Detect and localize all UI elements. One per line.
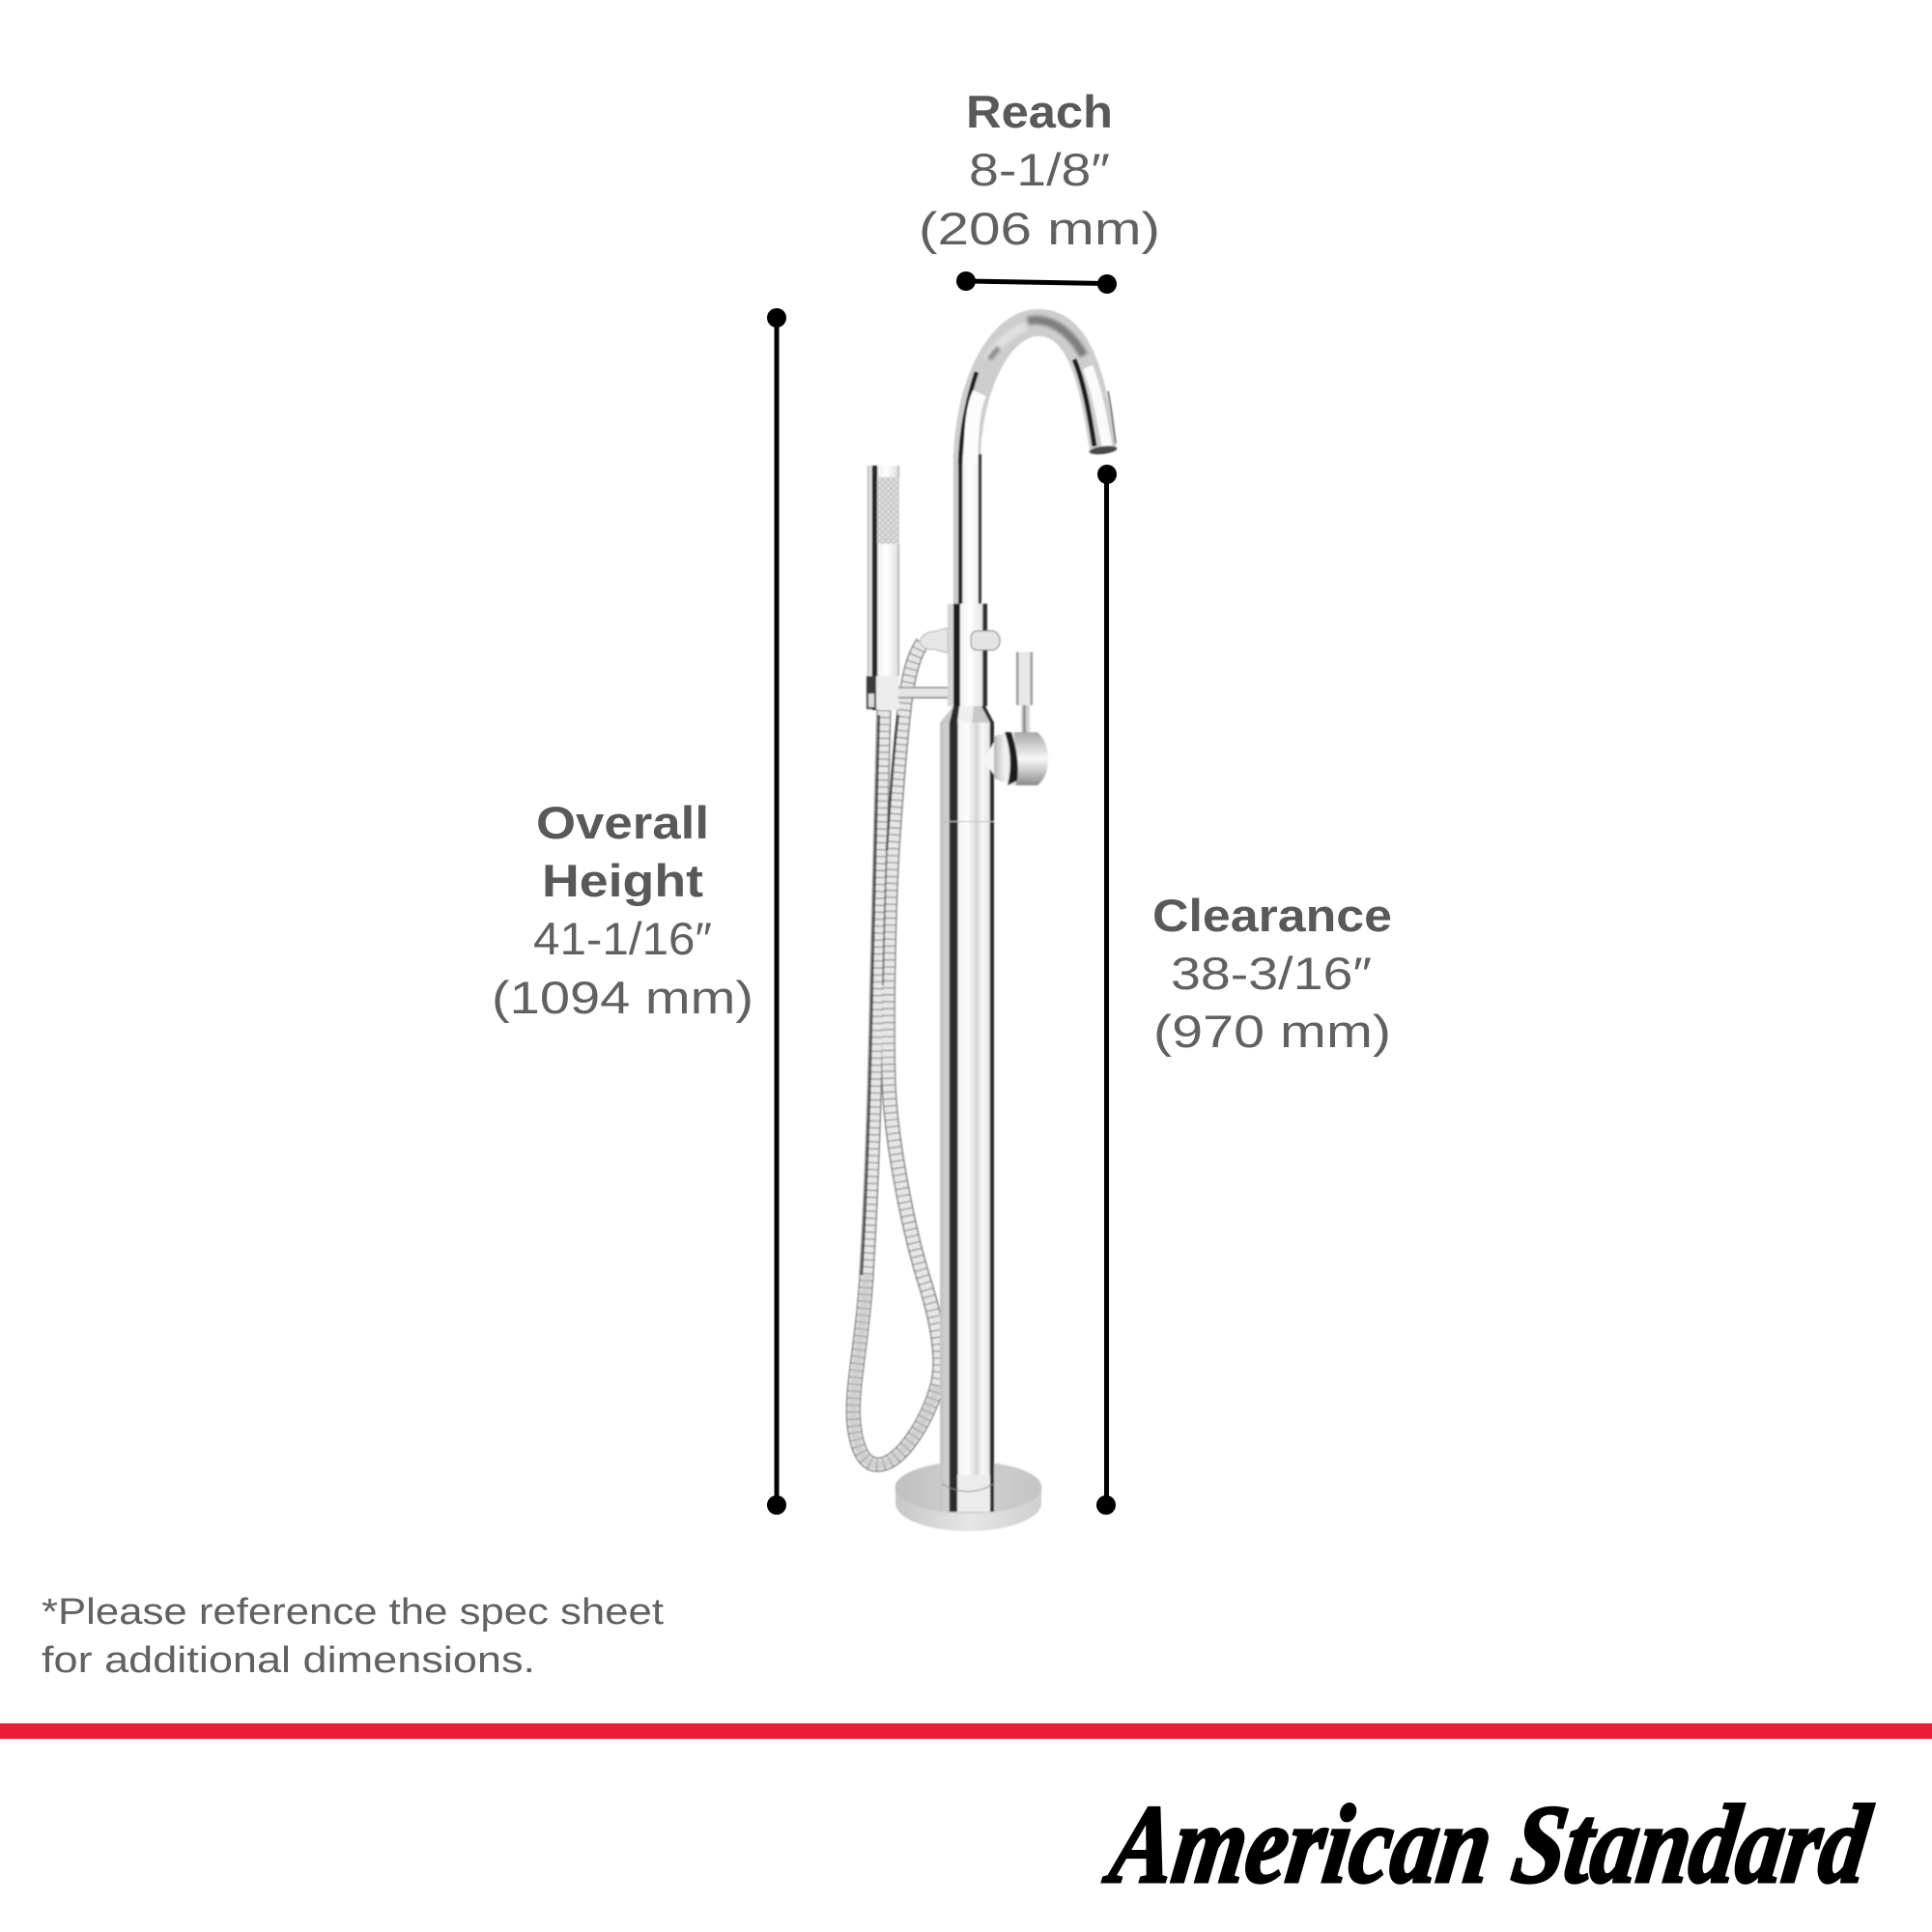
- footnote: for additional dimensions.: [42, 1640, 535, 1681]
- reach label: 8-1/8″: [969, 144, 1110, 195]
- reach label: (206 mm): [919, 203, 1160, 254]
- overall height label: [492, 797, 753, 1023]
- column shoulder: [940, 706, 994, 723]
- overall height dimension line: [767, 308, 786, 1515]
- floor plate: [895, 1462, 1041, 1531]
- hand shower: [867, 466, 899, 710]
- overall height label: 41-1/16″: [533, 913, 712, 964]
- gooseneck spout: [953, 320, 1118, 618]
- footnote: *Please reference the spec sheet: [42, 1592, 665, 1633]
- lever handle: [1016, 652, 1033, 732]
- reach label: [919, 86, 1160, 254]
- overall height label: (1094 mm): [492, 972, 753, 1023]
- collar knob: [971, 631, 1000, 650]
- main column: [940, 723, 994, 1512]
- reach dimension line: [956, 271, 1117, 294]
- shower holder arm: [898, 687, 953, 698]
- reach label: Reach: [966, 86, 1113, 137]
- clearance label: (970 mm): [1153, 1006, 1391, 1057]
- clearance dimension line: [1096, 465, 1117, 1515]
- footnote: [42, 1592, 665, 1681]
- clearance label: 38-3/16″: [1171, 948, 1372, 999]
- clearance label: [1152, 890, 1392, 1057]
- overall height label: Overall: [536, 797, 709, 848]
- faucet illustration: [853, 320, 1118, 1531]
- clearance label: Clearance: [1152, 890, 1392, 941]
- mixer body: [983, 732, 1048, 785]
- red divider bar: [0, 1723, 1932, 1739]
- spout collar: [948, 604, 987, 706]
- overall height label: Height: [542, 855, 703, 906]
- hose connector: [920, 628, 948, 653]
- shower hose: [853, 642, 940, 1464]
